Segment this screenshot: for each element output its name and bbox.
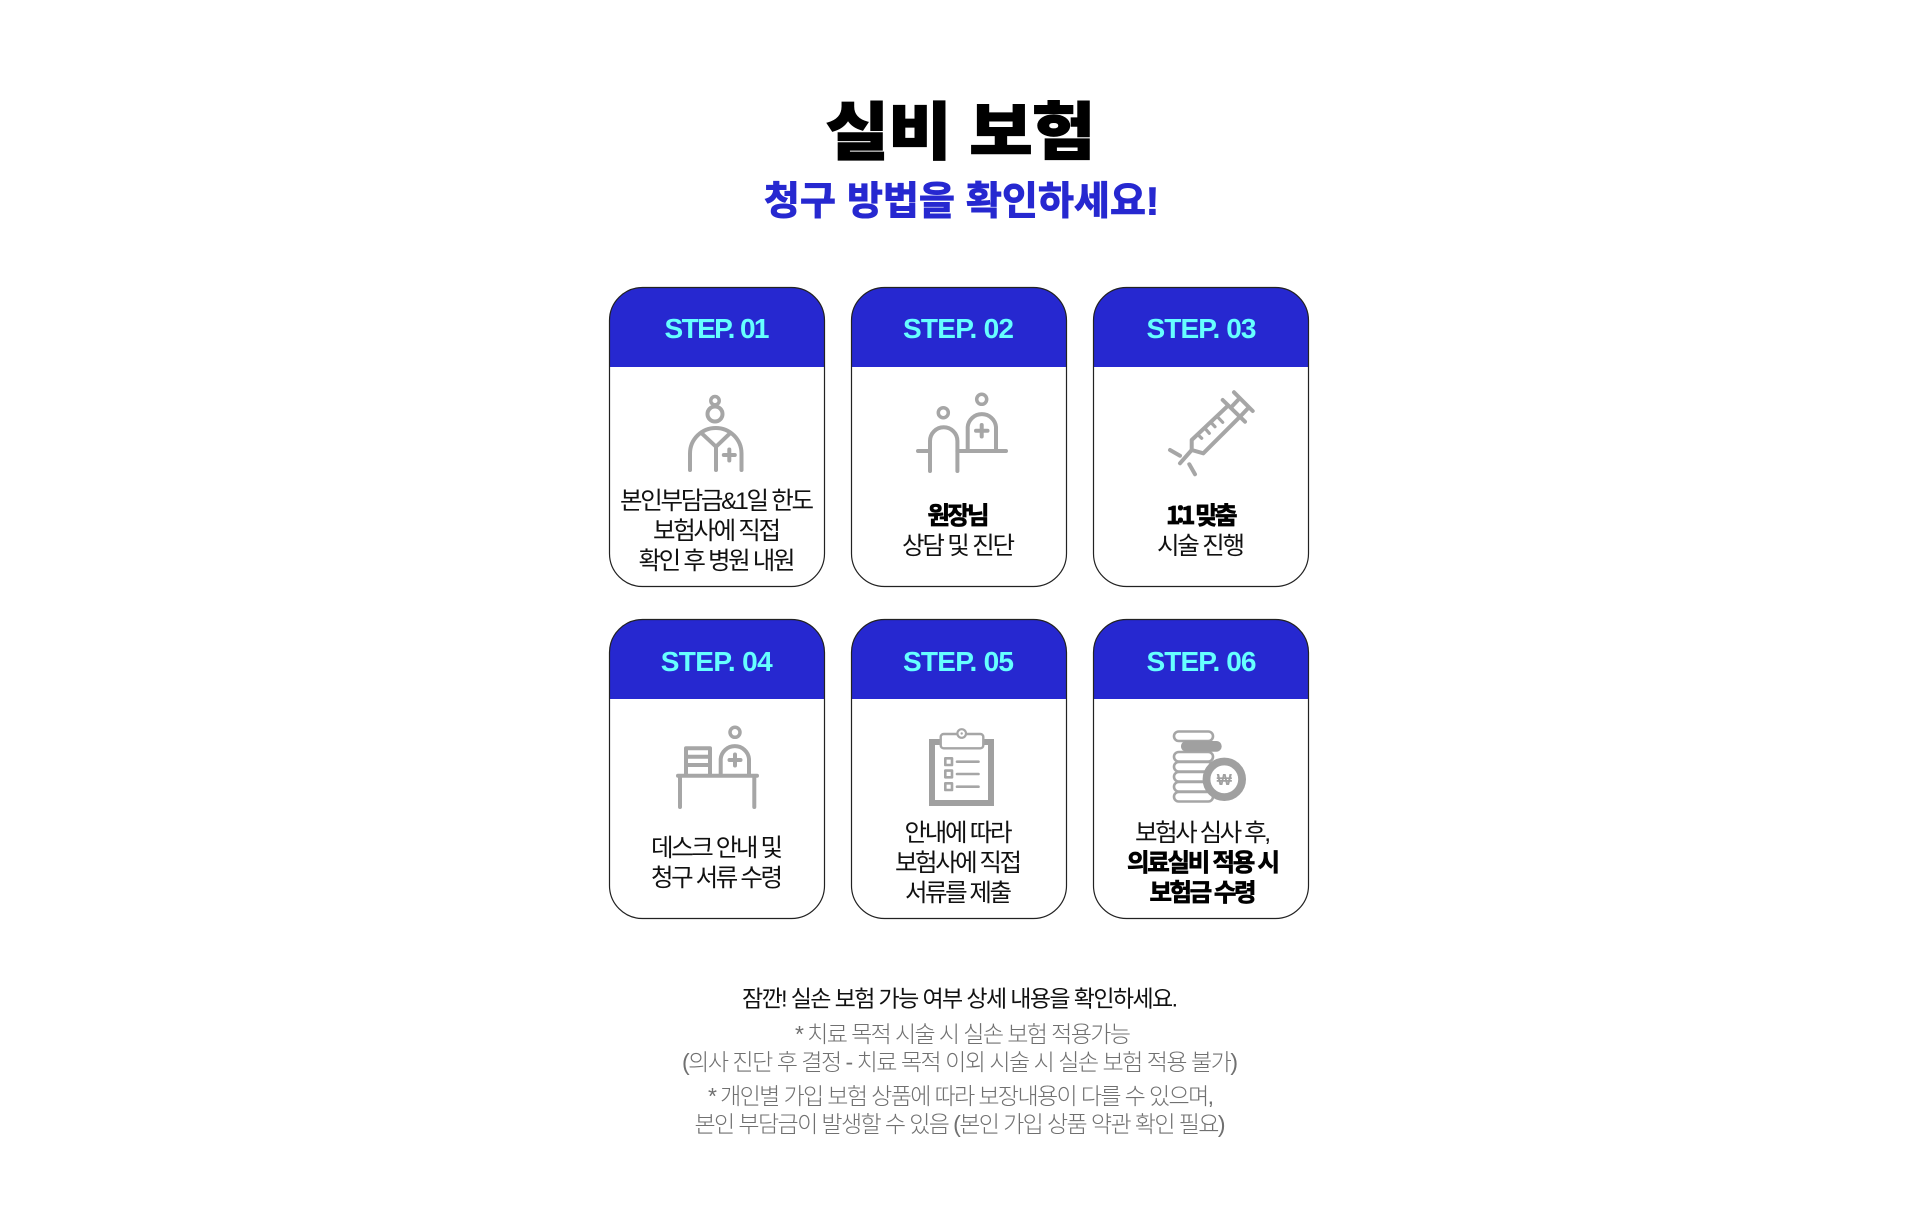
step 02 outline <box>852 288 1066 586</box>
panel: step 01 <box>610 288 824 586</box>
subtitle: 청구 방법을 확인하세요! <box>764 180 1159 224</box>
note: individual policy: * 개인별 가입 보험 상품에 따라 보장내용이 다를 수 있으며, <box>708 1083 1214 1109</box>
step 01 label: STEP. 01 <box>664 313 770 344</box>
icon: clipboard <box>929 729 994 806</box>
step 03 outline <box>1094 288 1308 586</box>
step 02 text: 원장님 <box>928 502 990 530</box>
step 06 text: 보험사 심사 후, <box>1135 819 1271 847</box>
step 05 outline <box>852 620 1066 918</box>
step 04 label: STEP. 04 <box>661 646 773 677</box>
note heading: 잠깐! 실손 보험 가능 여부 상세 내용을 확인하세요. <box>742 986 1178 1012</box>
panel: step 04 <box>610 620 824 918</box>
step 06 text: 보험금 수령 <box>1150 879 1256 907</box>
step 06 outline <box>1094 620 1308 918</box>
step 01 text: 확인 후 병원 내원 <box>638 547 796 575</box>
panel: step 02 <box>852 287 1066 586</box>
step 06 label: STEP. 06 <box>1146 646 1256 677</box>
panel: step 05 <box>852 620 1066 918</box>
step 03 label: STEP. 03 <box>1146 313 1256 344</box>
title: 실비 보험 <box>826 97 1096 167</box>
step 05 header <box>852 620 1066 699</box>
step 01 text <box>620 487 814 575</box>
step 03 text: 시술 진행 <box>1157 532 1245 560</box>
note: individual policy: 본인 부담금이 발생할 수 있음 (본인 가입 상품 약관 확인 필요) <box>694 1111 1226 1137</box>
step 02 header <box>852 287 1066 367</box>
step 02 label: STEP. 02 <box>903 313 1014 344</box>
note: treatment purpose: * 치료 목적 시술 시 실손 보험 적용가능 <box>795 1021 1131 1047</box>
icon: syringe <box>1170 392 1253 474</box>
step 01 header <box>610 288 824 367</box>
step 01 outline <box>610 288 824 586</box>
step 04 text <box>651 834 783 892</box>
note: individual policy <box>694 1083 1226 1137</box>
panel: step 06 <box>1094 620 1308 918</box>
step 05 text: 안내에 따라 <box>904 819 1012 847</box>
icon: reception desk <box>678 727 757 807</box>
icon: doctor <box>690 396 742 470</box>
icon: coins: ₩ <box>1217 772 1233 789</box>
step 06 header <box>1094 620 1308 699</box>
icon: patient and doctor <box>918 394 1006 471</box>
step 05 text: 보험사에 직접 <box>895 849 1022 877</box>
note: treatment purpose <box>682 1021 1238 1075</box>
step 01 text: 보험사에 직접 <box>653 517 781 545</box>
step 04 text: 청구 서류 수령 <box>651 864 783 892</box>
step 03 header <box>1094 288 1308 367</box>
step 04 text: 데스크 안내 및 <box>651 834 783 862</box>
icon: coins <box>1174 732 1242 802</box>
note: treatment purpose: (의사 진단 후 결정 - 치료 목적 이외 시술 시 실손 보험 적용 불가) <box>682 1049 1238 1075</box>
step 04 header <box>610 620 824 699</box>
step 05 text <box>895 819 1022 907</box>
step 06 text: 의료실비 적용 시 <box>1127 849 1280 877</box>
step 02 text <box>902 502 1015 560</box>
step 03 text: 1:1 맞춤 <box>1166 497 1238 532</box>
step 04 outline <box>610 620 824 918</box>
step 05 label: STEP. 05 <box>903 646 1014 677</box>
step 05 text: 서류를 제출 <box>905 879 1012 907</box>
step 02 text: 상담 및 진단 <box>902 532 1015 560</box>
panel: step 03 <box>1094 288 1308 586</box>
step 06 text <box>1127 819 1280 907</box>
step 03 text <box>1157 497 1245 560</box>
step 01 text: 본인부담금&1일 한도 <box>620 487 814 515</box>
